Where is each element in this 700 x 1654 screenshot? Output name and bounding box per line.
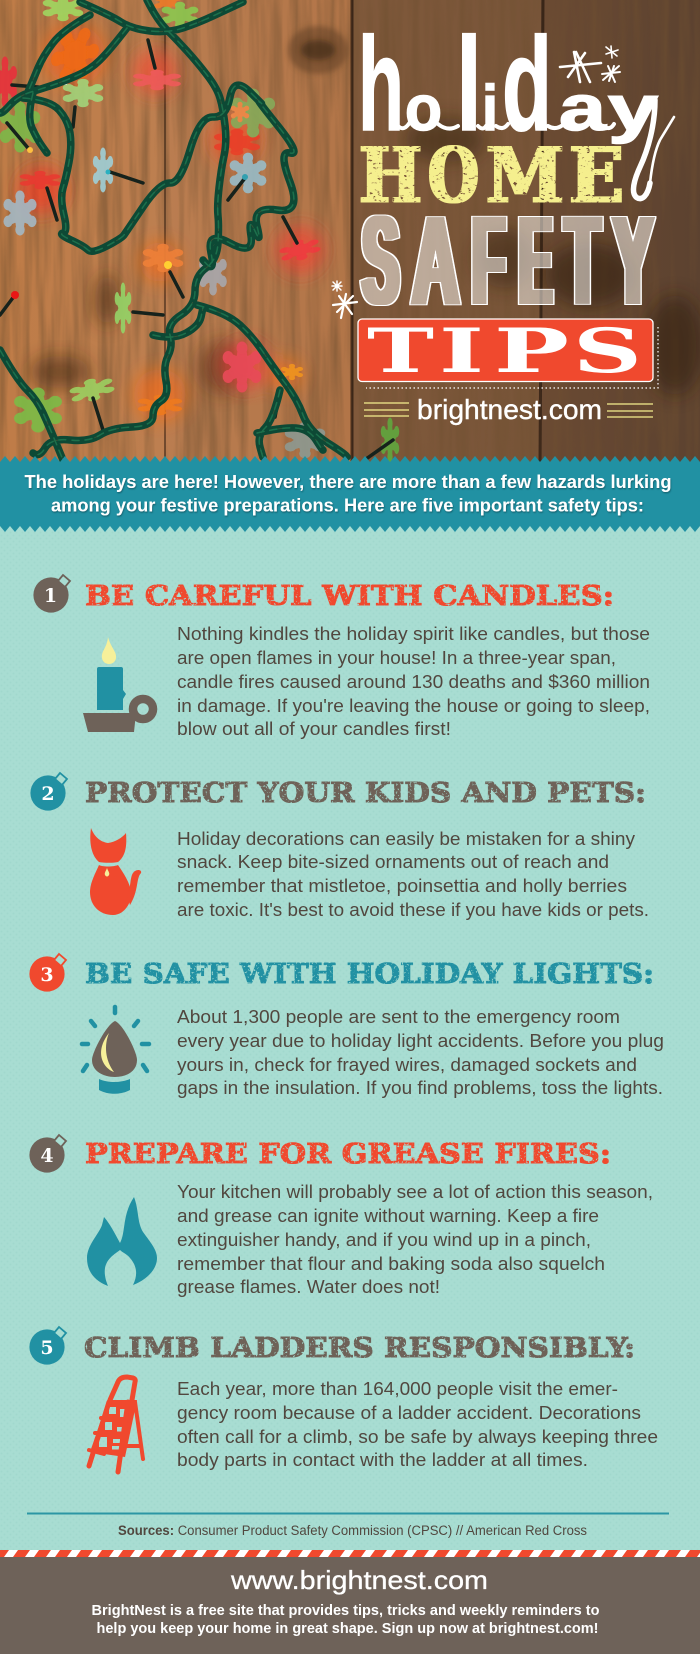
intro band (0, 456, 700, 532)
body text 1: Nothing kindles the holiday spirit like candles, but those (177, 624, 650, 644)
icons: snowflakes near title (332, 46, 620, 318)
footer description (92, 1603, 600, 1637)
photo: string of holiday lights (0, 0, 400, 462)
intro text: The holidays are here! However, there are more than a few hazards lurking (24, 472, 672, 492)
title: holiday: h (358, 11, 404, 159)
body text 2: are toxic. It's best to avoid these if you have kids or pets. (177, 900, 649, 920)
wires (0, 0, 347, 460)
heading 3: BE SAFE WITH HOLIDAY LIGHTS: (85, 959, 654, 990)
body text 5: gency room because of a ladder accident. Decorations (177, 1403, 641, 1423)
ornament 2: 2 (41, 783, 55, 805)
body text 2: snack. Keep bite-sized ornaments out of reach and (177, 852, 609, 872)
footer (0, 1557, 700, 1654)
title: TIPS badge: P (494, 316, 569, 387)
title: SAFETY: F (472, 190, 505, 331)
body text 2 (177, 829, 649, 920)
title: holiday: l (456, 11, 482, 159)
icon: cat (90, 828, 141, 915)
flourish: script connectors and y tail (398, 100, 674, 199)
body text 5: Each year, more than 164,000 people visit the emer- (177, 1379, 618, 1399)
heading 4: PREPARE FOR GREASE FIRES: (85, 1139, 611, 1170)
section 5: ladders (29, 1327, 658, 1472)
body text 4: extinguisher handy, and if you wind up in a pinch, (177, 1230, 591, 1250)
section 4: grease fires (29, 1135, 653, 1297)
bulb leads (0, 40, 393, 459)
ornament 3: 3 (40, 964, 54, 986)
body text 2: Holiday decorations can easily be mistaken for a shiny (177, 829, 635, 849)
title: brightnest.com with lines: brightnest.com (417, 394, 602, 425)
body text 4: grease flames. Water does not! (177, 1277, 440, 1297)
body text 4 (177, 1182, 653, 1297)
title: HOME: E (569, 131, 624, 220)
ornament 5 (29, 1327, 66, 1365)
sources: Sources: Consumer Product Safety Commission (CPSC) // American Red Cross (118, 1523, 587, 1538)
body text 3: every year due to holiday light accidents. Before you plug (177, 1031, 664, 1051)
section 1: candles (33, 575, 650, 739)
title: holiday: y (608, 72, 659, 144)
footer description: help you keep your home in great shape. Sign up now at brightnest.com! (96, 1621, 598, 1637)
section 3: holiday lights (29, 954, 664, 1098)
title: HOME: O (428, 131, 479, 220)
light glows (18, 25, 324, 421)
title: SAFETY: E (519, 190, 552, 331)
body text 3 (177, 1007, 664, 1098)
body text 5 (177, 1379, 658, 1470)
heading 2: PROTECT YOUR KIDS AND PETS: (85, 778, 646, 809)
footer description: BrightNest is a free site that provides tips, tricks and weekly reminders to (92, 1603, 600, 1619)
body text 3: gaps in the insulation. If you find problems, toss the lights. (177, 1078, 663, 1098)
body text 4: remember that flour and baking soda also squelch (177, 1254, 605, 1274)
section 2: kids and pets (30, 773, 649, 920)
candy stripe divider (0, 1550, 700, 1557)
title: SAFETY: T (565, 190, 600, 331)
footer url: www.brightnest.com (230, 1565, 488, 1595)
intro text: among your festive preparations. Here are five important safety tips: (51, 496, 644, 516)
ornament 1: 1 (44, 585, 57, 607)
body text 1: candle fires caused around 130 deaths and $360 million (177, 672, 650, 692)
ornament 4 (29, 1135, 66, 1173)
title: holiday: o (405, 72, 442, 144)
title: HOME: H (359, 131, 422, 220)
body text 1: blow out all of your candles first! (177, 719, 451, 739)
body text 1 (177, 624, 650, 739)
body text 5: body parts in contact with the ladder at all times. (177, 1450, 588, 1470)
ornament 5: 5 (40, 1337, 54, 1359)
icon: flame (87, 1197, 157, 1286)
body text 4: and grease can ignite without warning. Keep a fire (177, 1206, 599, 1226)
title: holiday: i (482, 72, 498, 144)
ornament 2 (30, 773, 67, 811)
icon: step ladder (89, 1377, 143, 1472)
LED points (11, 79, 248, 404)
ornament 4: 4 (40, 1145, 54, 1167)
title: brightnest.com with lines (364, 394, 653, 425)
body text 2: remember that mistletoe, poinsettia and holly berries (177, 876, 627, 896)
title: SAFETY: S (362, 190, 399, 331)
title: TIPS badge (358, 316, 658, 388)
title: HOME (359, 131, 624, 220)
photo: wooden planks background (0, 0, 700, 462)
title: holiday: d (502, 11, 552, 159)
body text 3: yours in, check for frayed wires, damaged sockets and (177, 1055, 637, 1075)
title: TIPS badge: I (439, 316, 484, 387)
heading 5: CLIMB LADDERS RESPONSIBLY: (84, 1333, 635, 1364)
heading 1: BE CAREFUL WITH CANDLES: (85, 581, 614, 612)
icon: candle (83, 637, 153, 732)
bulbs (0, 0, 400, 462)
title: holiday (358, 11, 659, 159)
title: TIPS badge: T (367, 316, 434, 387)
body text 1: are open flames in your house! In a three-year span, (177, 648, 616, 668)
ornament 1 (33, 575, 70, 613)
title: holiday: a (559, 72, 607, 144)
title: SAFETY (362, 190, 653, 331)
title: TIPS badge: S (573, 316, 642, 387)
sources rule (27, 1512, 669, 1514)
body text 1: in damage. If you're leaving the house or going to sleep, (177, 696, 650, 716)
body text 4: Your kitchen will probably see a lot of action this season, (177, 1182, 653, 1202)
text: Y (613, 190, 653, 331)
ornament 3 (29, 954, 66, 992)
intro text (24, 472, 672, 516)
icon: light bulb (82, 1007, 149, 1094)
title: SAFETY: A (412, 190, 459, 331)
body text 3: About 1,300 people are sent to the emergency room (177, 1007, 620, 1027)
title: HOME: M (486, 131, 564, 220)
body text 5: often call for a climb, so be safe by always keeping three (177, 1427, 658, 1447)
